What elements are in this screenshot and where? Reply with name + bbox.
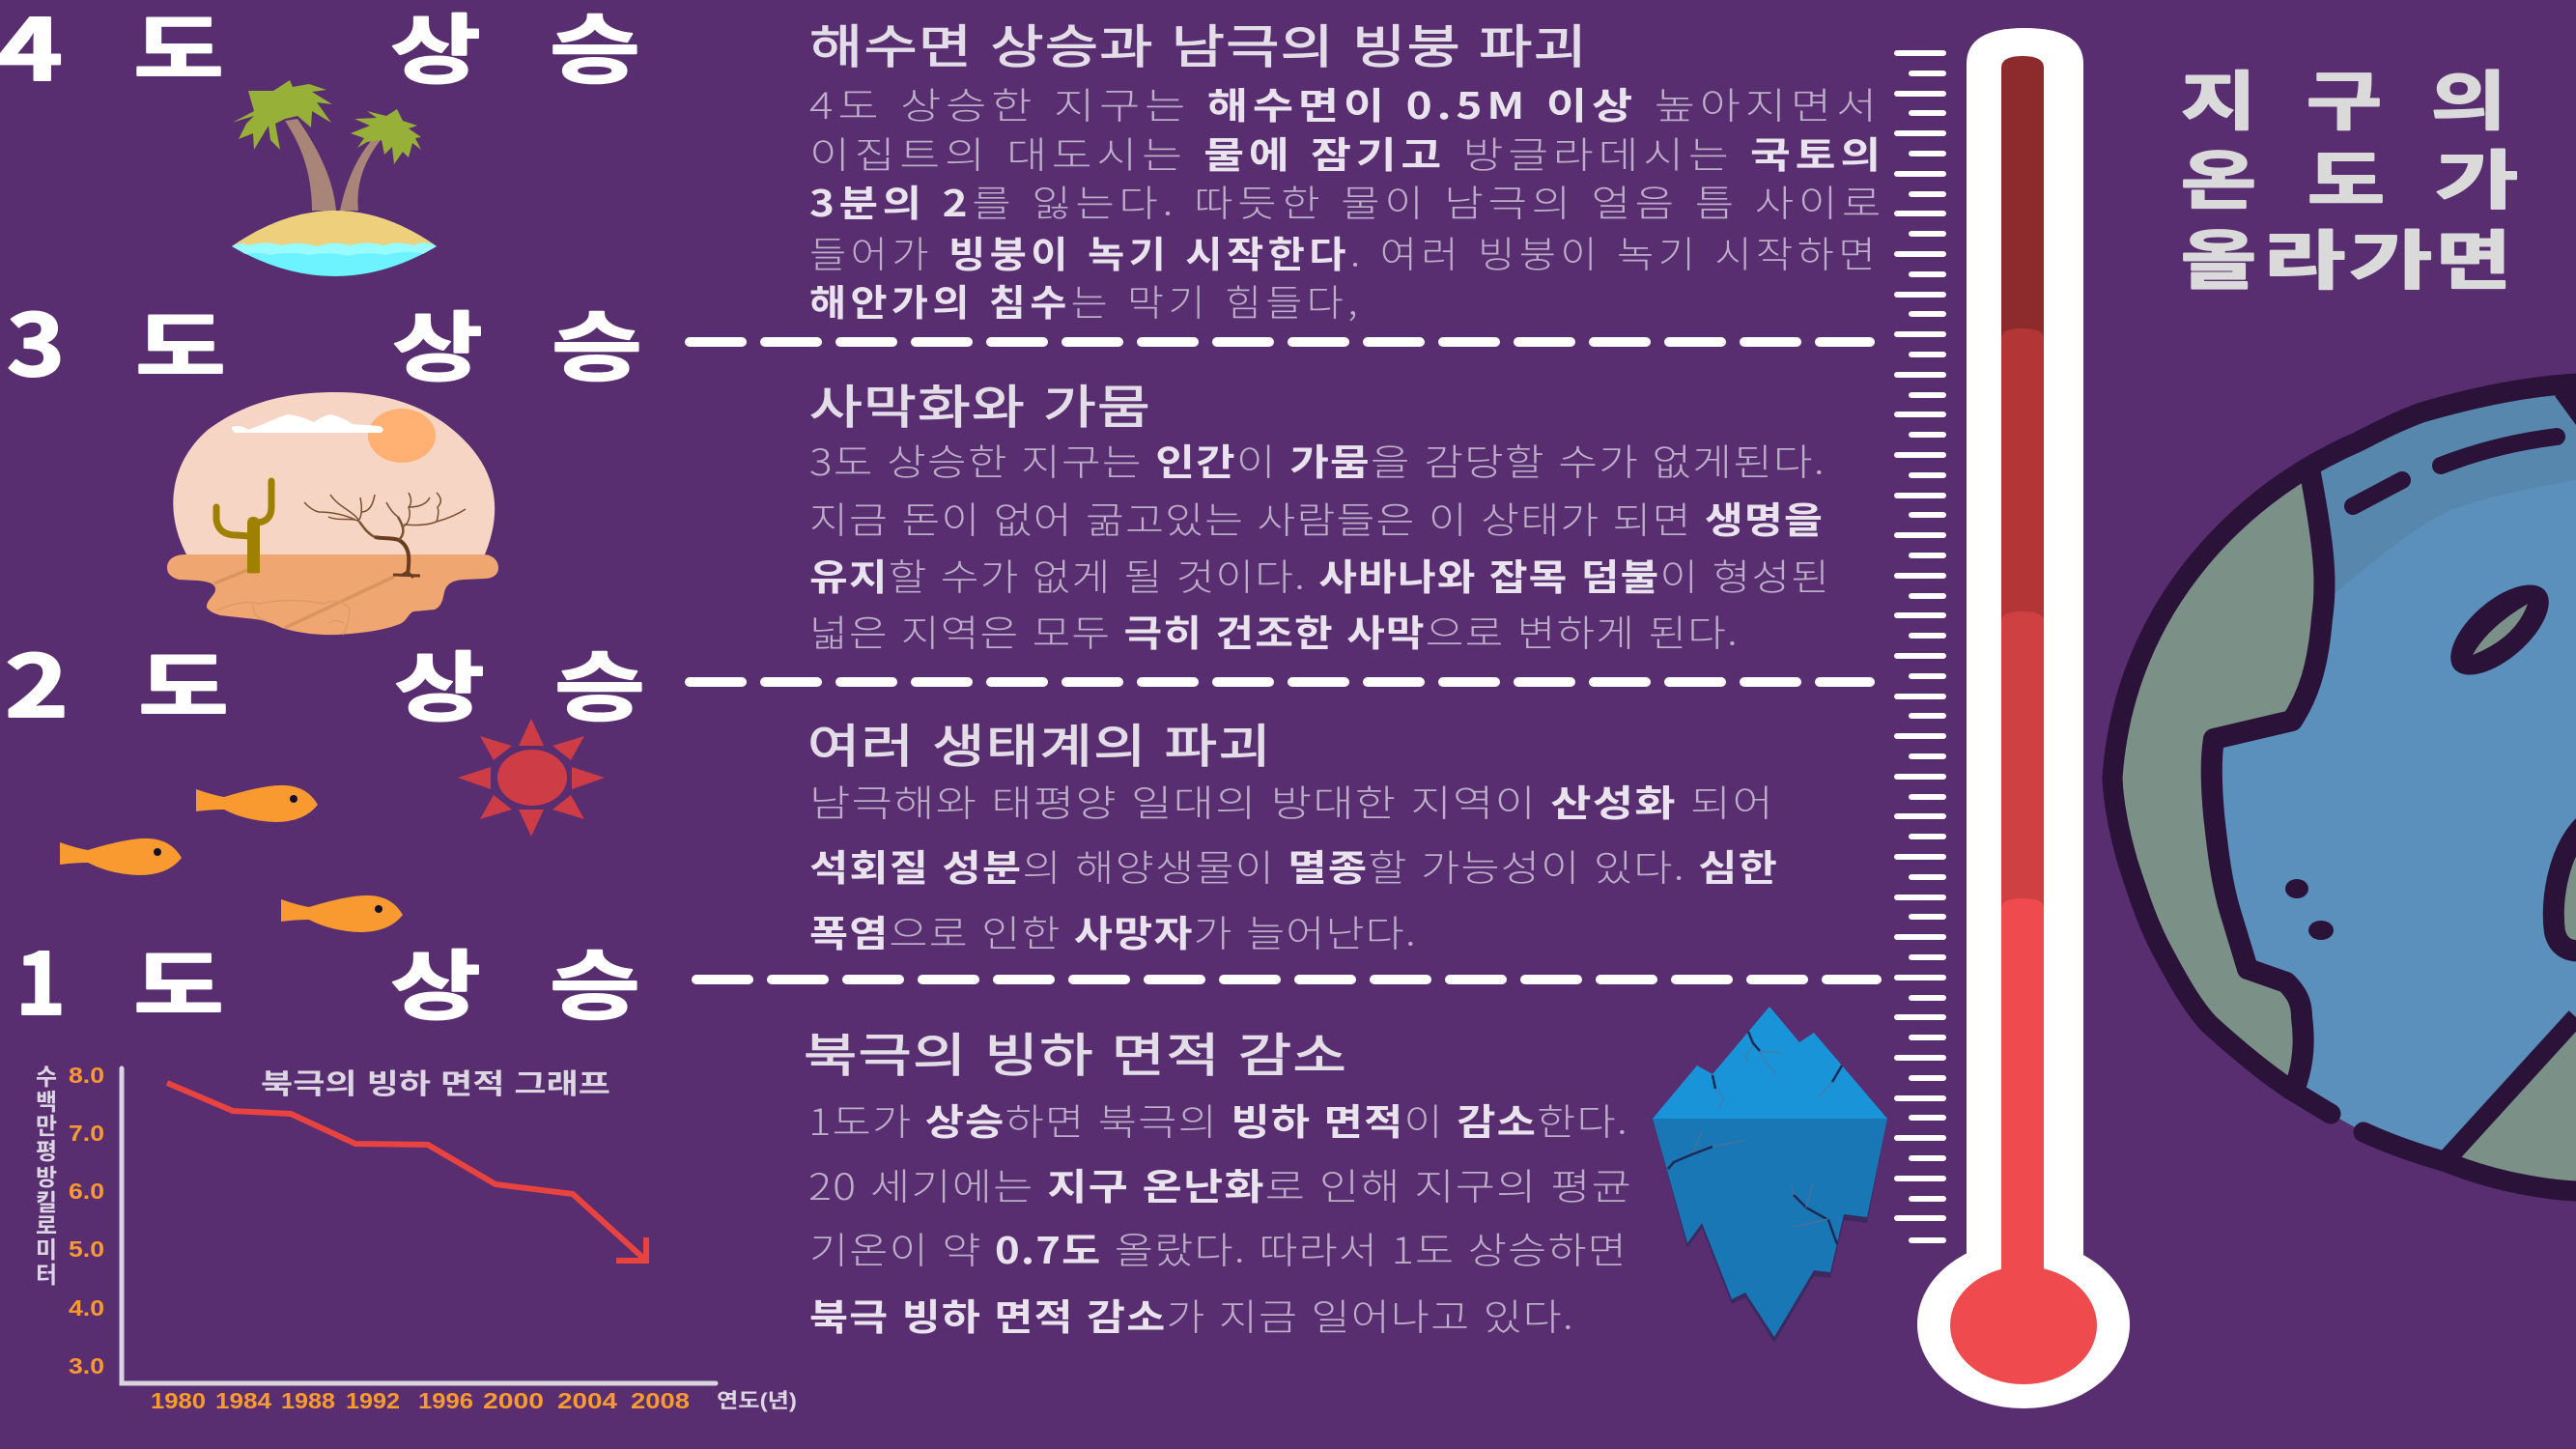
title: 가 (2349, 210, 2432, 302)
x axis labels: 1992 (346, 1388, 400, 1413)
y axis labels: 3.0 (69, 1353, 104, 1378)
section body: 해안가의 침수 는 막기 힘들다, (809, 273, 1362, 327)
section: arctic sea ice decrease (804, 1017, 1632, 1341)
section body: 이집트의 대도시는 물에 잠기고 방글라데시는 국토의 (809, 126, 1885, 179)
x axis labels: 2008 (631, 1388, 690, 1413)
heading: 1 degree rise: 도 (133, 926, 224, 1035)
x axis labels: 1988 (281, 1388, 335, 1413)
section body: 넓은 지역은 모두 극히 건조한 사막 으로 변하게 된다. (809, 604, 1739, 657)
title: 구 (2307, 50, 2382, 143)
heading: 3 degree rise: 도 (135, 288, 226, 396)
thermometer tick marks (1897, 53, 1943, 1240)
thermometer (1897, 28, 2130, 1408)
icon: iceberg (1653, 1007, 1887, 1343)
x axis labels (151, 1388, 797, 1413)
title: 면 (2436, 210, 2511, 302)
heading: 3 degree rise: 승 (552, 288, 641, 396)
section heading: 북극의 빙하 면적 감소 (804, 1017, 1347, 1085)
icon: fish 3 (281, 895, 403, 932)
heading: 2 degree rise: 승 (554, 628, 645, 736)
section body (809, 433, 1830, 657)
heading: 2 degree rise (5, 619, 645, 742)
icon: desert scene (167, 392, 498, 635)
y axis labels: 8.0 (69, 1063, 104, 1088)
title: 가 (2435, 129, 2518, 222)
section body: 폭염 으로 인한 사망자 가 늘어난다. (809, 904, 1417, 957)
section body: 4도 상승한 지구는 해수면이 0.5M 이상 높아지면서 (809, 76, 1882, 129)
title: 의 (2431, 50, 2506, 143)
section: desertification and drought (809, 369, 1830, 657)
section: sea level rise (809, 9, 1885, 327)
y axis title: 킬 (36, 1183, 57, 1217)
axes (122, 1068, 716, 1383)
title (2181, 50, 2518, 302)
y axis labels: 5.0 (69, 1236, 104, 1262)
section body (809, 774, 1778, 957)
heading: 4 degree rise (0, 0, 639, 105)
y axis title: 미 (36, 1231, 57, 1264)
section body: 기온이 약 0.7도 올랐다. 따라서 1도 상승하면 (809, 1221, 1628, 1274)
chart: arctic sea ice area (36, 1058, 797, 1413)
y axis labels (69, 1063, 104, 1378)
x axis labels: 1996 (418, 1388, 473, 1413)
heading: 1 degree rise: 상 (390, 926, 481, 1035)
thermometer white tube and bulb (1917, 28, 2130, 1408)
y axis title: 만 (36, 1107, 57, 1141)
heading: 3 degree rise: 3 (7, 278, 65, 401)
section body: 유지 할 수가 없게 될 것이다. 사바나와 잡목 덤불 이 형성된 (809, 548, 1830, 601)
chart title: 북극의 빙하 면적 그래프 (261, 1068, 610, 1100)
y axis title: 수 (36, 1058, 57, 1092)
section body: 3도 상승한 지구는 인간 이 가뭄 을 감당할 수가 없게된다. (809, 433, 1826, 486)
y axis labels: 4.0 (69, 1295, 104, 1321)
heading: 3 degree rise (7, 278, 641, 401)
y axis title: 터 (36, 1256, 57, 1290)
icon: palm island (232, 80, 437, 276)
y axis labels: 6.0 (69, 1179, 104, 1204)
x axis labels: 2004 (557, 1388, 617, 1413)
section body (808, 1093, 1632, 1341)
section body: 지금 돈이 없어 굶고있는 사람들은 이 상태가 되면 생명을 (809, 491, 1824, 544)
section heading: 해수면 상승과 남극의 빙붕 파괴 (809, 9, 1588, 76)
section heading: 사막화와 가뭄 (809, 369, 1151, 437)
x axis labels: 2000 (483, 1388, 544, 1413)
x axis labels: 1984 (215, 1388, 271, 1413)
section body: 1도가 상승 하면 북극의 빙하 면적 이 감소 한다. (808, 1093, 1628, 1146)
icon: red sun (458, 719, 605, 837)
heading: 2 degree rise: 도 (139, 628, 228, 736)
title: 도 (2307, 129, 2385, 222)
x axis labels: 1980 (151, 1388, 206, 1413)
section body: 석회질 성분 의 해양생물이 멸종 할 가능성이 있다. 심한 (809, 838, 1778, 892)
thermometer mercury levels (1950, 56, 2097, 1384)
y axis title: 백 (36, 1083, 57, 1117)
section body: 3분의 2 를 잃는다. 따듯한 물이 남극의 얼음 틈 사이로 (809, 174, 1885, 227)
icon: fish 1 (196, 785, 318, 822)
heading: 2 degree rise: 2 (5, 619, 69, 742)
title: 지 (2181, 50, 2256, 143)
y axis labels: 7.0 (69, 1121, 104, 1146)
title: 올 (2181, 210, 2256, 302)
heading: 3 degree rise: 상 (392, 288, 483, 396)
section: ecosystem destruction (807, 708, 1778, 957)
section body: 남극해와 태평양 일대의 방대한 지역이 산성화 되어 (809, 774, 1774, 827)
section body: 20 세기에는 지구 온난화 로 인해 지구의 평균 (808, 1157, 1632, 1210)
y axis title: 평 (36, 1132, 57, 1166)
section body: 들어가 빙붕이 녹기 시작한다 . 여러 빙붕이 녹기 시작하면 (809, 225, 1880, 278)
heading: 1 degree rise (15, 917, 639, 1039)
section body (809, 76, 1885, 327)
icon: fish 2 (60, 838, 182, 875)
section heading: 여러 생태계의 파괴 (807, 708, 1272, 776)
trend line with arrow (167, 1083, 646, 1261)
y axis title: 로 (36, 1207, 57, 1240)
icon: earth (2112, 384, 2576, 1191)
heading: 1 degree rise: 승 (551, 926, 639, 1035)
y axis title: 방 (36, 1158, 57, 1192)
section body: 북극 빙하 면적 감소 가 지금 일어나고 있다. (809, 1288, 1574, 1341)
title: 라 (2264, 210, 2345, 302)
title: 온 (2181, 129, 2256, 222)
heading: 1 degree rise: 1 (15, 917, 66, 1039)
x axis labels: 연도(년) (717, 1390, 797, 1412)
heading: 2 degree rise: 상 (394, 628, 485, 736)
y axis title (36, 1058, 57, 1290)
